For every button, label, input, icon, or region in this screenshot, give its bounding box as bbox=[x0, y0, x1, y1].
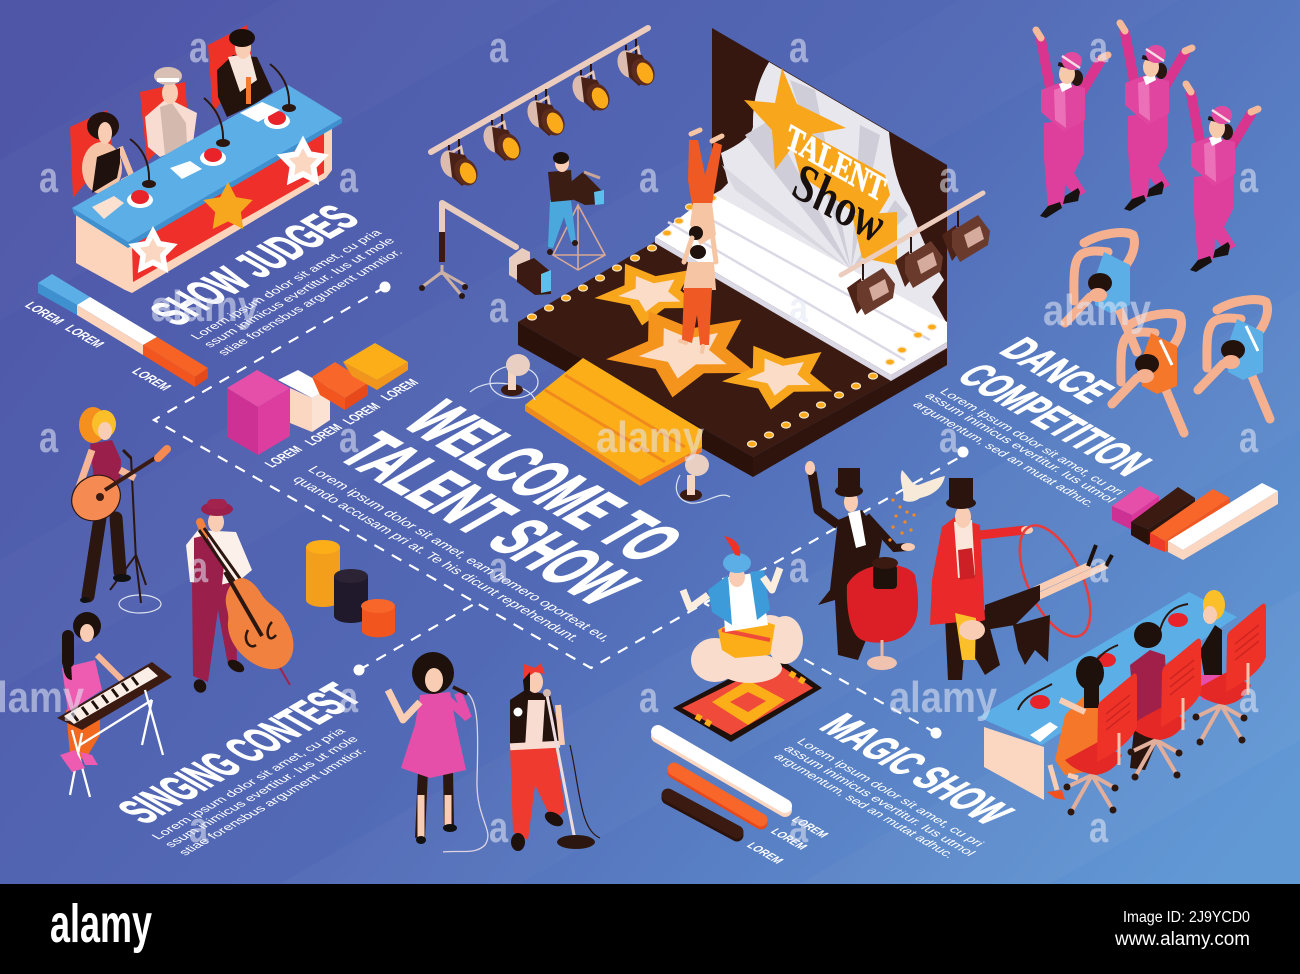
cube chart labels: LOREM bbox=[301, 421, 346, 448]
watermark pattern: a bbox=[639, 673, 659, 722]
judge: man with cap bbox=[140, 67, 197, 162]
judge: man with scarf bbox=[208, 25, 273, 117]
cameraman with tripod bbox=[547, 152, 605, 270]
watermark pattern: alamy bbox=[1043, 286, 1151, 335]
text block: magic show: argumentum, sed an mutat adhuc. bbox=[770, 751, 958, 860]
bar chart: dance blocks bbox=[1112, 483, 1278, 560]
watermark pattern: a bbox=[39, 153, 59, 202]
footer bar: Image ID: 2J9YCD0 bbox=[1123, 909, 1250, 926]
watermark pattern: a bbox=[789, 543, 809, 592]
white steps bbox=[655, 193, 947, 381]
keyboard player bbox=[57, 612, 172, 797]
watermark pattern: a bbox=[789, 803, 809, 852]
bar chart labels: LOREM bbox=[61, 322, 108, 350]
watermark pattern: a bbox=[939, 153, 959, 202]
icon: floor spot left bbox=[470, 354, 538, 400]
gymnast 3 bbox=[1198, 300, 1270, 419]
footer bar bbox=[0, 884, 1300, 974]
gymnasts bbox=[1065, 233, 1270, 433]
watermark pattern: a bbox=[639, 153, 659, 202]
watermark pattern: a bbox=[189, 543, 209, 592]
footer bar: alamy bbox=[50, 894, 152, 954]
bar chart: cylinders bbox=[306, 540, 395, 637]
watermark pattern: a bbox=[1089, 23, 1109, 72]
cloud bbox=[691, 615, 803, 683]
text block: intro: quando accusam pri at. Te his dicunt reprehendunt. bbox=[289, 473, 585, 644]
watermark pattern: alamy bbox=[596, 413, 704, 462]
front spotlight rig bbox=[841, 193, 990, 315]
dove and confetti bbox=[888, 470, 945, 542]
watermark pattern: a bbox=[339, 153, 359, 202]
double bass player bbox=[186, 499, 293, 695]
bar chart labels: LOREM bbox=[128, 365, 175, 393]
singer in pink dress bbox=[388, 652, 488, 852]
floor stars bbox=[580, 248, 861, 418]
text block: magic show: Lorem ipsum dolor sit amet, cu pri bbox=[793, 736, 987, 849]
heading: show judges: SHOW JUDGES bbox=[138, 198, 371, 333]
stage floor bbox=[518, 215, 947, 457]
watermark pattern: a bbox=[1089, 543, 1109, 592]
talent show sign: Show bbox=[788, 150, 889, 257]
desk items: buzzers, papers, microphones bbox=[92, 64, 296, 219]
watermark pattern: a bbox=[489, 803, 509, 852]
text block: show judges: ssum inimicus evertitur. Ius ut mole bbox=[200, 235, 398, 350]
watermark pattern: a bbox=[39, 413, 59, 462]
dashed flow lines bbox=[154, 282, 968, 738]
title: welcome to talent show: WELCOME TO bbox=[386, 391, 701, 573]
table with magic hat bbox=[847, 557, 918, 670]
panel: main stage bbox=[518, 28, 990, 486]
text block: dance competition: argumentum, sed an mutat adhuc. bbox=[909, 399, 1099, 509]
seated blonde woman bbox=[1198, 590, 1230, 700]
magic bars labels: LOREM bbox=[788, 814, 832, 840]
magician with top hat bbox=[805, 461, 915, 660]
bar chart: magic capsule bars bbox=[658, 732, 785, 835]
genie on carpet bbox=[673, 536, 822, 742]
text block: singing contest: Lorem ipsum dolor sit amet, cu pria bbox=[148, 726, 349, 842]
icon: floor spot front bbox=[676, 454, 730, 503]
text block: show judges: Lorem ipsum dolor sit amet, cu pria bbox=[187, 227, 385, 342]
heading: dance competition: DANCE bbox=[989, 331, 1125, 410]
watermark pattern: a bbox=[489, 543, 509, 592]
watermark pattern: a bbox=[939, 413, 959, 462]
watermark pattern: a bbox=[189, 23, 209, 72]
red chairs bbox=[1064, 604, 1266, 816]
text block: singing contest bbox=[148, 726, 369, 858]
talent show sign: TALENT bbox=[782, 118, 890, 210]
genie figure bbox=[683, 536, 780, 658]
footer bar: www.alamy.com bbox=[1114, 929, 1250, 950]
panel: show judges desk bbox=[70, 25, 342, 293]
text block: singing contest: stiae forensbus argument umntior. bbox=[175, 745, 369, 858]
ringmaster and hoop act bbox=[930, 478, 1112, 680]
stage back wall bbox=[712, 28, 947, 365]
cube chart labels: LOREM bbox=[261, 443, 306, 470]
table bbox=[978, 592, 1237, 800]
text block: dance competition: Lorem ipsum dolor sit amet, cu pri bbox=[936, 386, 1128, 497]
magic bars labels: LOREM bbox=[767, 826, 811, 852]
flying carpet bbox=[673, 655, 822, 742]
gymnast 2 bbox=[1112, 314, 1184, 433]
panel: judges table seen from behind bbox=[978, 590, 1266, 816]
guitar player bbox=[63, 407, 167, 613]
watermark pattern: a bbox=[489, 283, 509, 332]
watermark pattern: a bbox=[339, 413, 359, 462]
heading: dance competition: COMPETITION bbox=[946, 357, 1163, 482]
text block: dance competition bbox=[909, 386, 1128, 509]
watermark pattern: a bbox=[189, 803, 209, 852]
talent show sign bbox=[744, 68, 897, 265]
seated man bbox=[1130, 622, 1168, 770]
icon: camera crane bbox=[419, 203, 551, 299]
bar chart labels: LOREM bbox=[21, 299, 68, 327]
text block: intro: Lorem ipsum dolor sit amet, eam homero oporteat eu, bbox=[304, 463, 616, 644]
text block: show judges bbox=[187, 227, 406, 358]
bar chart: show judges segmented bar bbox=[38, 274, 208, 387]
watermark pattern: a bbox=[1239, 413, 1259, 462]
watermark pattern: a bbox=[1239, 673, 1259, 722]
watermark pattern: alamy bbox=[889, 673, 997, 722]
cube chart labels: LOREM bbox=[339, 400, 384, 427]
watermark pattern: a bbox=[1089, 803, 1109, 852]
bar chart: colored cubes bbox=[227, 343, 408, 455]
watermark pattern: a bbox=[339, 673, 359, 722]
watermark pattern: a bbox=[489, 23, 509, 72]
gymnast 1 bbox=[1065, 233, 1137, 352]
text block: singing contest: ssum inimicus evertitur. Ius ut mole bbox=[161, 734, 362, 850]
dancers in pink suits bbox=[1036, 23, 1258, 272]
stage backdrop with rays bbox=[712, 62, 946, 322]
heading: magic show: MAGIC SHOW bbox=[809, 707, 1024, 831]
text block: magic show: assum inimicus evertitur. Ius utmol bbox=[780, 743, 979, 858]
acrobats bbox=[680, 130, 722, 352]
panel: stage lighting rig bbox=[431, 28, 659, 189]
text block: dance competition: assum inimicus evertitur. Ius utmol bbox=[921, 390, 1119, 505]
stage bulbs bbox=[528, 195, 936, 447]
text block: magic show bbox=[770, 736, 987, 860]
stairs bbox=[525, 358, 702, 486]
heading: singing contest: SINGING CONTEST bbox=[106, 676, 373, 831]
bar chart labels bbox=[21, 299, 175, 393]
title: welcome to talent show bbox=[321, 391, 701, 616]
seated woman in orange bbox=[1047, 656, 1104, 800]
rock singer with mic stand bbox=[510, 663, 600, 851]
watermark pattern: a bbox=[1239, 153, 1259, 202]
watermark pattern: a bbox=[789, 23, 809, 72]
desk bbox=[72, 85, 342, 293]
watermark pattern: alamy bbox=[151, 282, 259, 331]
watermark pattern: a bbox=[789, 283, 809, 332]
title: welcome to talent show: TALENT SHOW bbox=[321, 423, 655, 616]
cube chart labels bbox=[261, 376, 422, 470]
magic bars labels bbox=[743, 814, 832, 866]
magic bars labels: LOREM bbox=[743, 840, 787, 866]
cube chart labels: LOREM bbox=[377, 376, 422, 403]
text block: show judges: stiae forensbus argument umntior. bbox=[214, 247, 406, 358]
heading: dance competition bbox=[946, 331, 1163, 482]
judge: woman bbox=[70, 110, 132, 198]
